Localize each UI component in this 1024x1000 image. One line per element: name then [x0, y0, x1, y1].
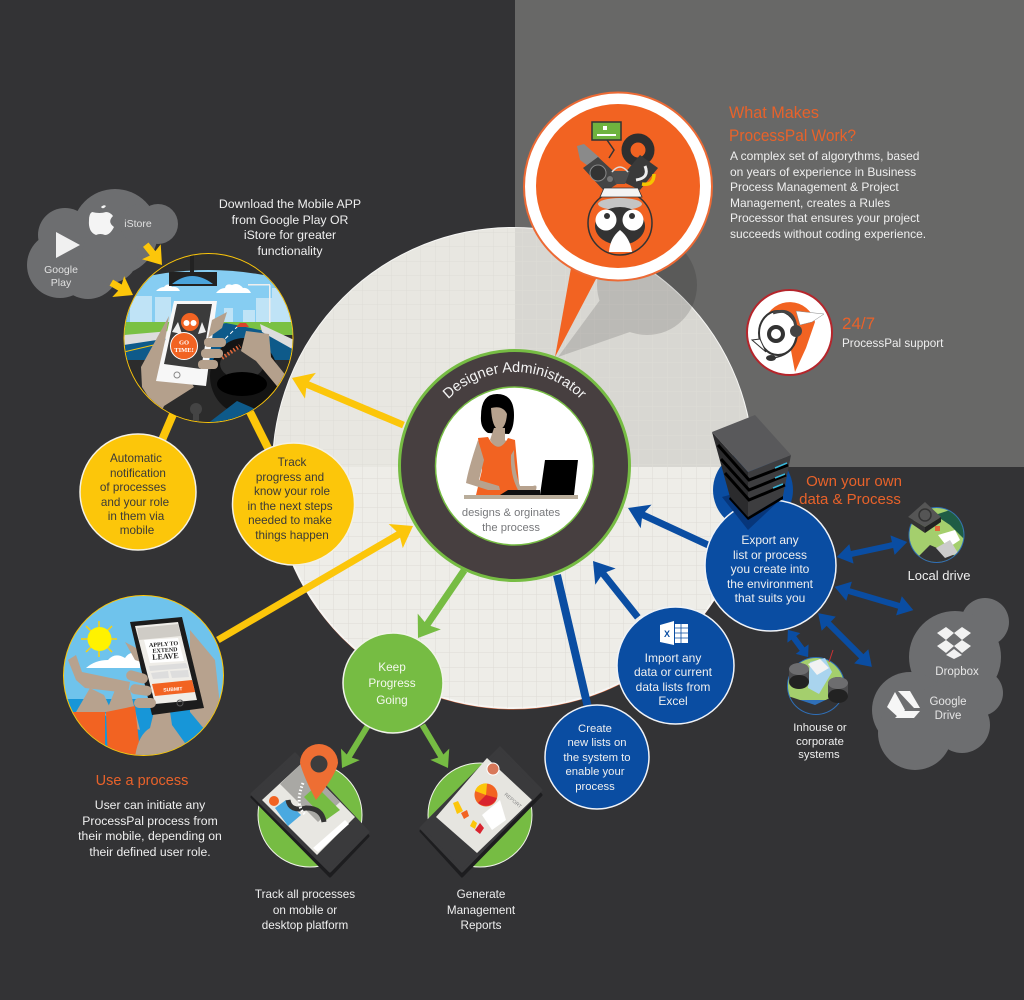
arrow: keep progress to reports — [413, 719, 457, 774]
illustration: report tablet — [421, 748, 541, 876]
arrow: Google Play to phone — [105, 272, 139, 305]
circle: automatic notification: Automatic — [110, 452, 162, 465]
arrow: keep progress to tracking — [333, 720, 377, 774]
circle: track progress: things happen — [255, 529, 329, 542]
icon: Google Play — [56, 232, 80, 258]
icon: map pin — [300, 744, 338, 800]
label: Google Drive — [929, 696, 967, 722]
label: Dropbox: Dropbox — [935, 666, 979, 678]
text block: download the mobile app — [219, 197, 361, 258]
title: Designer Administrator: Designer Administrator — [442, 362, 586, 398]
heading: What Makes ProcessPal Work: ProcessPal Work? — [729, 127, 856, 145]
label: inhouse systems: corporate — [796, 736, 844, 748]
icon: excel: X — [664, 629, 670, 639]
text block: download the mobile app: Download the Mobile APP — [219, 197, 361, 211]
icon: Dropbox — [937, 627, 971, 659]
cloud: Dropbox and Google Drive — [872, 598, 1009, 770]
label: Google Play: Play — [51, 277, 72, 289]
illustration: driving with phone — [120, 250, 300, 425]
text: import data — [634, 651, 713, 708]
text block: download the mobile app: functionality — [258, 244, 323, 258]
central grid circle — [272, 228, 755, 710]
text: export any list: list or process — [733, 548, 807, 562]
text: export any list — [727, 533, 814, 605]
label: Google Drive: Drive — [935, 710, 961, 722]
text block: algorithm description: A complex set of algorythms, based — [730, 149, 919, 163]
heading: 24/7 support — [842, 314, 944, 350]
circle: track progress: Track — [278, 456, 307, 469]
text block: use a process body — [78, 798, 222, 859]
bubble drop shadow — [558, 235, 697, 357]
text block: algorithm description — [730, 149, 926, 241]
icon: engine penguin mascot — [577, 122, 658, 255]
icon: Google Drive — [887, 691, 920, 718]
circle: automatic notification: notification — [110, 467, 166, 480]
circle: keep progress going: Going — [376, 693, 408, 707]
text: export any list: you create into — [731, 562, 810, 576]
text: track all processes: desktop platform — [262, 919, 348, 932]
illustration: report tablet: REPORT — [503, 792, 522, 810]
circle: keep progress going — [343, 633, 443, 733]
arrow: export to centre — [623, 496, 715, 558]
label: Google Play — [44, 264, 78, 289]
heading: own your own data — [799, 473, 902, 508]
icon: woman at laptop — [464, 394, 578, 499]
text block: algorithm description: Process Management & Project — [730, 180, 899, 194]
circle: automatic notification: of processes — [100, 481, 166, 494]
circle: track progress: in the next steps — [247, 500, 333, 513]
text: track all processes — [255, 888, 355, 932]
central designer administrator ring — [398, 349, 631, 582]
circle: automatic notification: in them via — [108, 510, 165, 523]
illustration: beach with phone — [63, 595, 224, 756]
label: Google Drive: Google — [929, 696, 967, 708]
text block: algorithm description: Processor that ensures your project — [730, 211, 920, 225]
text: import data: data or current — [634, 665, 713, 679]
circle: track progress — [232, 443, 354, 565]
text: track all processes: on mobile or — [273, 904, 337, 917]
text: import data: Excel — [658, 694, 688, 708]
circle: track progress: needed to make — [248, 514, 332, 527]
label: inhouse systems: systems — [798, 749, 840, 761]
heading: own your own data: Own your own — [806, 473, 902, 490]
circle: export with server — [705, 450, 836, 631]
text: export any list: Export any — [741, 533, 799, 547]
text: designs and originates: the process — [482, 522, 540, 534]
circle: track progress: progress and — [256, 471, 324, 484]
text block: algorithm description: on years of experience in Business — [730, 165, 916, 179]
label: inhouse systems — [793, 722, 847, 761]
text block: download the mobile app: iStore for greater — [244, 228, 336, 242]
circle: automatic notification: and your role — [101, 496, 169, 509]
circle: automatic notification: mobile — [120, 524, 154, 537]
heading: 24/7 support: ProcessPal support — [842, 337, 944, 350]
callout: speech bubble with engine penguin — [524, 92, 712, 357]
text: designs and originates: designs & orginates — [462, 507, 561, 519]
heading: use a process: Use a process — [96, 773, 188, 789]
connector: create lists line — [557, 575, 589, 712]
label: iStore: iStore — [124, 218, 152, 230]
text block: use a process body: User can initiate any — [95, 798, 206, 812]
text: generate management reports: Generate — [457, 888, 505, 901]
label: Google Play: Google — [44, 264, 78, 276]
circle: create new lists: the system to — [563, 752, 631, 764]
illustration: beach with phone: SUBMIT — [163, 686, 183, 694]
arrow: centre to keep progress — [406, 562, 476, 646]
illustration: beach with phone: APPLY TO — [149, 641, 179, 649]
circle: keep progress going: Keep — [378, 660, 406, 674]
illustration: tracking tablet and map pin — [252, 744, 368, 876]
illustration: driving with phone: GO — [179, 340, 189, 346]
illustration: inhouse systems — [785, 650, 848, 720]
text block: algorithm description: Management, creates a Rules — [730, 196, 890, 210]
circle: create new lists: enable your — [565, 766, 625, 778]
arrow: beach process to centre — [211, 514, 420, 652]
text: export any list: the environment — [727, 577, 814, 591]
icon: server tower — [712, 415, 791, 530]
circle: create new lists: process — [575, 781, 615, 793]
text block: use a process body: their defined user role. — [89, 845, 211, 859]
heading: 24/7 support: 24/7 — [842, 314, 875, 333]
text: import data: data lists from — [636, 680, 710, 694]
text: designs and originates — [462, 507, 561, 534]
circle: automatic notification — [80, 434, 196, 550]
circle: import from excel — [617, 607, 734, 724]
heading: What Makes ProcessPal Work: What Makes — [729, 104, 819, 122]
text: generate management reports: Reports — [461, 919, 502, 932]
text: export any list: that suits you — [735, 591, 805, 605]
arrow: excel import to centre — [583, 553, 648, 625]
illustration: driving with phone: TIME! — [174, 347, 194, 354]
illustration: local drive — [908, 502, 964, 563]
label: local drive: Local drive — [908, 568, 970, 583]
text: import data: Import any — [645, 651, 701, 665]
label: inhouse systems: Inhouse or — [793, 722, 847, 734]
circle: create new lists — [545, 705, 649, 809]
grey panel top right — [515, 0, 1024, 467]
text block: download the mobile app: from Google Play OR — [232, 213, 349, 227]
illustration: beach with phone: EXTEND — [152, 647, 178, 655]
connector: yellow lines — [162, 412, 269, 450]
arrow: centre to driving phone — [287, 365, 409, 438]
icon: 24/7 support mascot — [747, 290, 832, 375]
illustration: beach with phone: LEAVE — [152, 651, 179, 662]
text: generate management reports: Management — [447, 904, 516, 917]
icon: Apple — [89, 205, 114, 235]
heading: What Makes ProcessPal Work — [729, 104, 856, 145]
circle: keep progress going: Progress — [368, 676, 416, 690]
circle: create new lists: Create — [578, 723, 612, 735]
cloud: app stores — [27, 189, 178, 299]
text: generate management reports — [447, 888, 516, 932]
arrows: export connections — [781, 532, 916, 674]
text: track all processes: Track all processes — [255, 888, 355, 901]
text block: algorithm description: succeeds without coding experience. — [730, 227, 926, 241]
heading: own your own data: data & Process — [799, 491, 901, 508]
text block: use a process body: ProcessPal process from — [82, 814, 218, 828]
circle: create new lists: new lists on — [567, 737, 627, 749]
arrow: iStore to phone — [136, 237, 171, 273]
text block: use a process body: their mobile, depending on — [78, 829, 222, 843]
circle: track progress: know your role — [254, 485, 330, 498]
